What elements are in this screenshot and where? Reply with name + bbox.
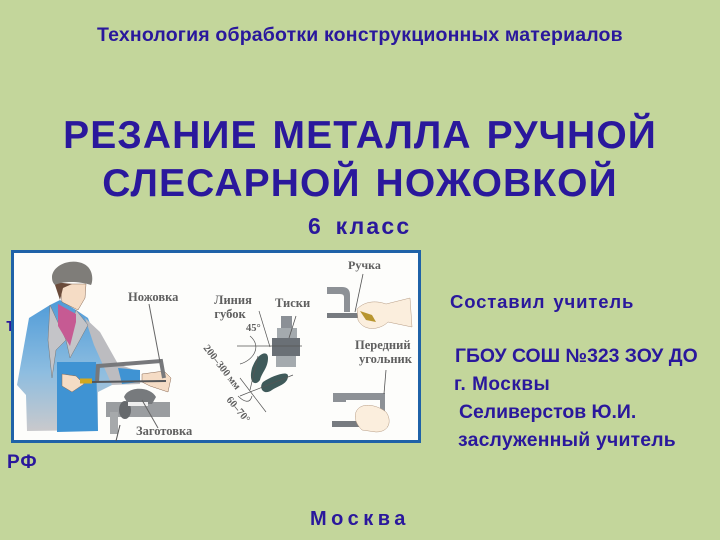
author: country: РФ <box>7 452 38 473</box>
footprints <box>251 353 268 383</box>
author: compiled by: Составил учитель <box>450 291 634 312</box>
label: Линия губок: губок <box>214 307 246 321</box>
subject heading: Технология обработки конструкционных материалов <box>97 24 623 46</box>
shirt and tie <box>58 304 76 346</box>
grade label: 6 класс <box>308 213 411 239</box>
author: name: Селиверстов Ю.И. <box>459 401 636 423</box>
hacksaw <box>97 361 164 382</box>
label: 60-70 degrees: 60–70° <box>224 395 252 425</box>
diagram: stance and vise <box>237 311 302 412</box>
head <box>60 284 86 310</box>
main title: РЕЗАНИЕ МЕТАЛЛА РУЧНОЙ <box>63 114 657 157</box>
label: Ножовка: Ножовка <box>128 290 179 304</box>
panel frame <box>12 252 420 442</box>
figure: worker with hacksaw <box>17 262 171 441</box>
author: city: г. Москвы <box>454 374 550 395</box>
author: school: ГБОУ СОШ №323 ЗОУ ДО <box>455 345 698 367</box>
label: 200-300 mm: 200–300 мм <box>201 343 242 392</box>
label: Заготовка: Заготовка <box>136 424 193 438</box>
label: 45 degrees: 45° <box>246 323 261 334</box>
label: Ручка: Ручка <box>348 258 381 272</box>
figure: hand on front bracket <box>332 370 389 432</box>
cap <box>52 262 92 285</box>
cut-off letter behind illustration: т <box>6 315 15 335</box>
figure: hand on handle <box>327 274 412 328</box>
vise top view <box>281 316 292 329</box>
label: Тиски: Тиски <box>275 296 310 310</box>
vise <box>106 402 170 417</box>
stance lines <box>240 356 293 412</box>
hands <box>62 374 84 392</box>
jacket <box>17 300 112 431</box>
label: Передний угольник: Передний <box>355 338 411 352</box>
label: Передний угольник: угольник <box>359 352 413 366</box>
city: Москва <box>310 508 410 530</box>
main title: СЛЕСАРНОЙ НОЖОВКОЙ <box>102 162 618 205</box>
author: title: заслуженный учитель <box>458 429 676 451</box>
main title <box>63 112 657 205</box>
label: Линия губок: Линия <box>214 293 252 307</box>
